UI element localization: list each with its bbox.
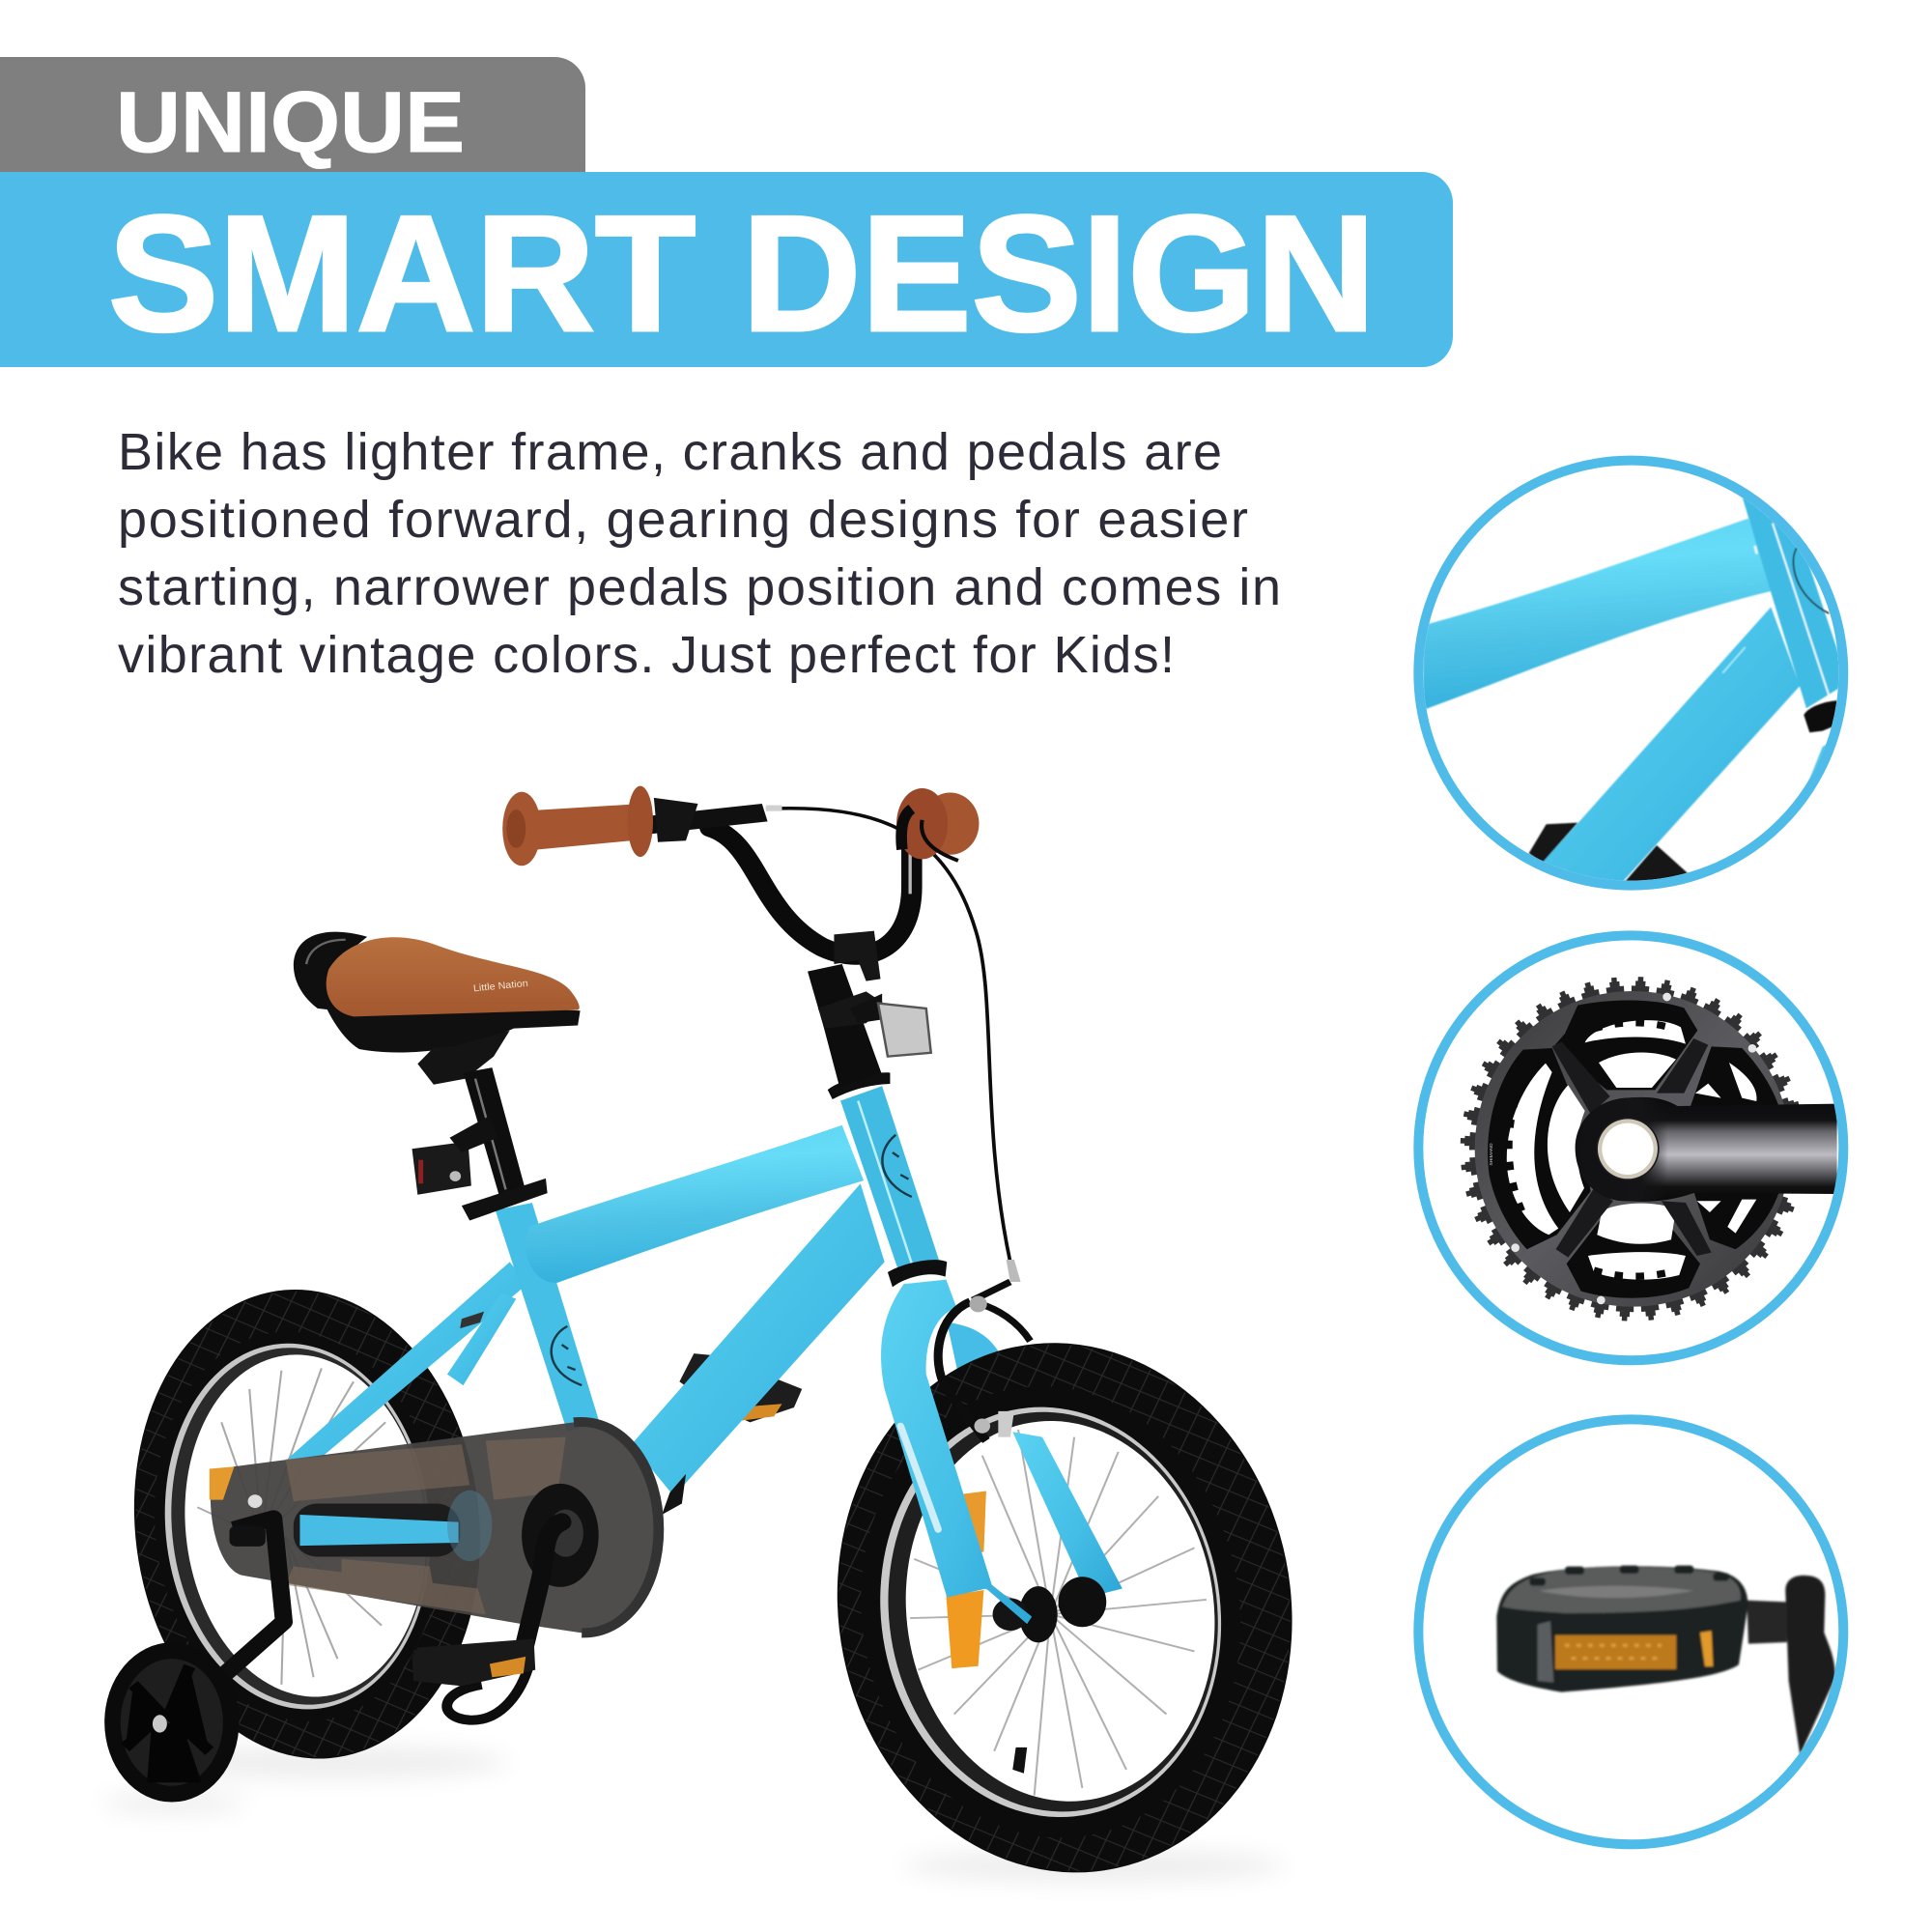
pedal studs [1529,1566,1729,1586]
pedal closeup [1496,1566,1835,1755]
ground shadows [101,1746,1287,1882]
small reflector [1700,1631,1713,1666]
valve [1012,1747,1027,1774]
top tube [1423,519,1773,710]
bicycle photo illustration [101,786,1321,1893]
seat tube [496,1203,600,1432]
rear wheel [113,1276,500,1772]
fork piece [1806,744,1826,782]
pedal axle [1747,1601,1787,1644]
frame tube closeup [1423,496,1848,889]
header: blue SMART DESIGN banner [0,172,1453,367]
headset rings [828,1072,947,1287]
training wheel [104,1494,284,1803]
fork far leg upper [947,1322,1008,1375]
chainring behind guard [522,1484,599,1587]
brake cable [766,809,1010,1262]
side band [1538,1621,1553,1683]
body text block: Bike has lighter frame, cranks and pedals are [118,423,1222,481]
seat post rear reflector [412,1116,497,1195]
seat stays [287,1262,527,1460]
brake lever [625,804,768,837]
down tube [1543,607,1800,889]
decal [1793,548,1829,613]
chainring teeth [1463,979,1803,1319]
front hub [993,1577,1106,1642]
right grip [896,788,979,859]
brake caliper and cable [766,809,1031,1440]
heading: SMART DESIGN: SMART DESIGN [108,182,1376,366]
guard rim [574,1422,659,1633]
top tube [526,1125,864,1283]
inset circle 2: chainring and crank [1418,935,1843,1360]
bike frame [287,1086,941,1515]
body text block: positioned forward, gearing designs for easier [118,491,1248,549]
pedal pieces [1529,823,1689,886]
pedal body [1496,1566,1747,1692]
handlebar [502,786,979,981]
saddle [294,932,581,1053]
seat post and clamp [412,1031,548,1220]
inner chainring teeth [1509,1023,1678,1276]
training wheel tyre and hub [104,1642,239,1803]
front wheel [810,1322,1321,1893]
down tube [632,1183,885,1496]
fork far leg lower [1012,1432,1122,1598]
body text block: vibrant vintage colors. Just perfect for Kids! [118,626,1175,684]
fork near leg [881,1280,1032,1624]
spider arms [1552,1038,1712,1258]
front reflector [946,1491,986,1668]
ring [1418,461,1843,886]
chain guard [211,1422,659,1633]
chain guard slot with chain stay [294,1491,492,1561]
body text block [118,423,1281,684]
crank and near pedal [412,1522,562,1720]
rear reflector on stay [210,1466,234,1500]
ring [1418,935,1843,1360]
ring [1418,1419,1843,1844]
frame decals [552,1135,912,1385]
saddle brand text: Little Nation [472,979,528,994]
chainring [1463,979,1803,1319]
heading: UNIQUE: UNIQUE [116,73,465,170]
far pedal [679,1353,802,1422]
front spokes [910,1430,1207,1796]
inset circle 1: frame tubes [1418,461,1848,889]
white gaps [1507,1020,1756,1280]
left window [1488,1048,1591,1249]
pedal reflector [1555,1635,1676,1669]
left grip [502,786,653,866]
header: grey UNIQUE tab [0,57,585,172]
top window [1553,1000,1697,1090]
fork sticker [900,1426,938,1529]
bottom window [1567,1208,1700,1298]
front silver reflector [850,994,931,1057]
crank arm [1576,1097,1837,1202]
pedal top face [1502,1567,1741,1613]
head tube [840,1086,941,1277]
bolts [1511,993,1756,1304]
chainring label: SHIMANO [1489,1143,1494,1166]
headset ring [1804,700,1842,732]
crank arm [1785,1576,1835,1755]
body text block: starting, narrower pedals position and comes in [118,558,1281,616]
head tube [1742,496,1848,708]
inset circle 3: pedal [1418,1419,1843,1844]
right window [1678,1046,1787,1249]
stem [808,964,881,1088]
